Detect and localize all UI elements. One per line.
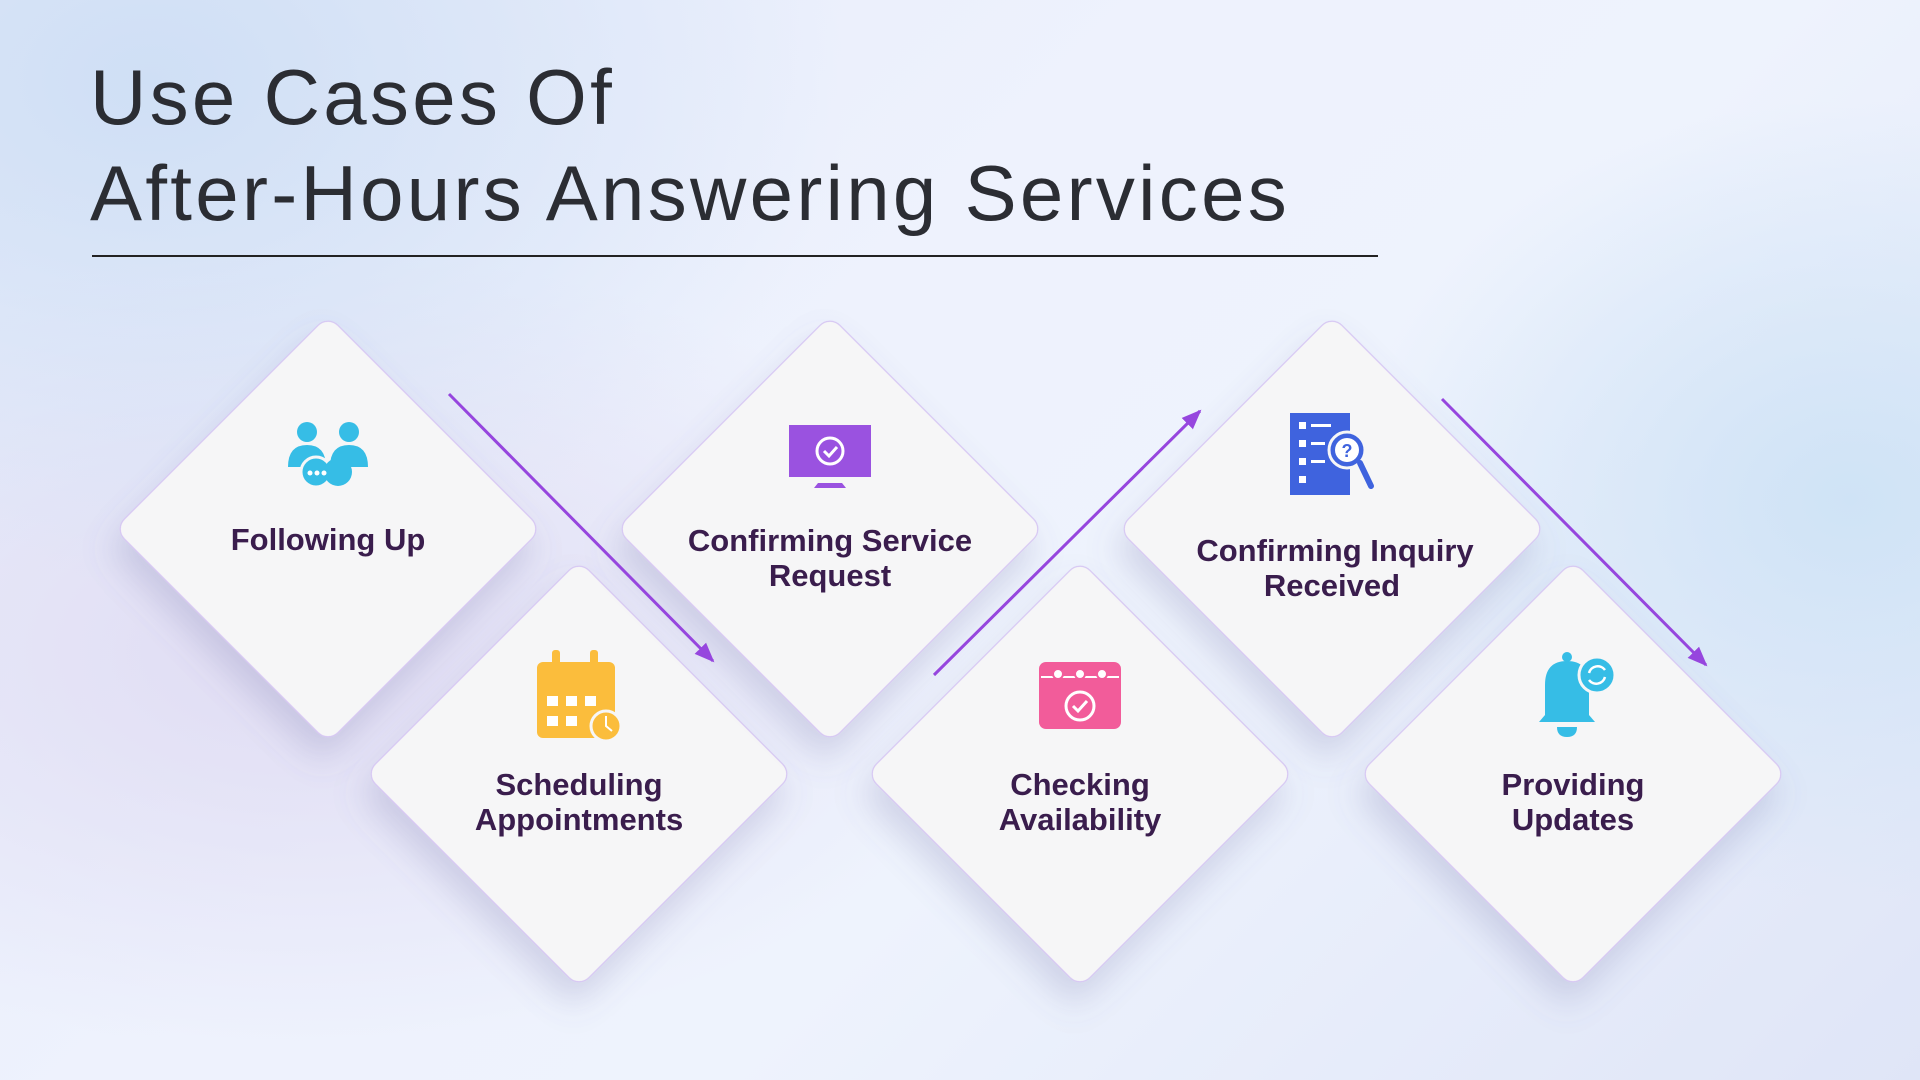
icon: calendar: [537, 650, 621, 741]
label: [999, 767, 1162, 837]
label: Following Up: [231, 522, 425, 557]
label: Appointments: [475, 802, 683, 837]
arrow 3: [1442, 399, 1706, 665]
label: [1196, 533, 1474, 603]
title: [90, 53, 1290, 237]
label: Confirming Service: [688, 523, 972, 558]
icon: monitor check: [789, 425, 871, 488]
title: Use Cases Of: [90, 53, 615, 141]
label: Received: [1264, 568, 1400, 603]
label: Updates: [1512, 802, 1634, 837]
label: Confirming Inquiry: [1196, 533, 1474, 568]
label: Providing: [1502, 767, 1644, 802]
label: Availability: [999, 802, 1162, 837]
diamond: Scheduling Appointments: [365, 560, 793, 988]
label: Checking: [1010, 767, 1150, 802]
label: [1502, 767, 1644, 837]
diamond: Providing Updates: [1359, 560, 1787, 988]
diamond: Checking Availability: [866, 560, 1294, 988]
icon: bell refresh: [1539, 652, 1615, 737]
label: [475, 767, 683, 837]
title: After-Hours Answering Services: [90, 149, 1290, 237]
arrow 2: [934, 411, 1200, 675]
icon: document search: [1290, 413, 1371, 495]
diamond: Following Up: [114, 315, 542, 743]
label: [688, 523, 972, 593]
diamond: Confirming Service Request: [616, 315, 1044, 743]
label: Scheduling: [495, 767, 663, 802]
icon: people chat: [288, 422, 368, 487]
icon: document search: ?: [1342, 441, 1352, 461]
label: Request: [769, 558, 891, 593]
arrow 1: [449, 394, 713, 661]
diamond: Confirming Inquiry Received: [1118, 315, 1546, 743]
icon: calendar check: [1039, 662, 1121, 729]
